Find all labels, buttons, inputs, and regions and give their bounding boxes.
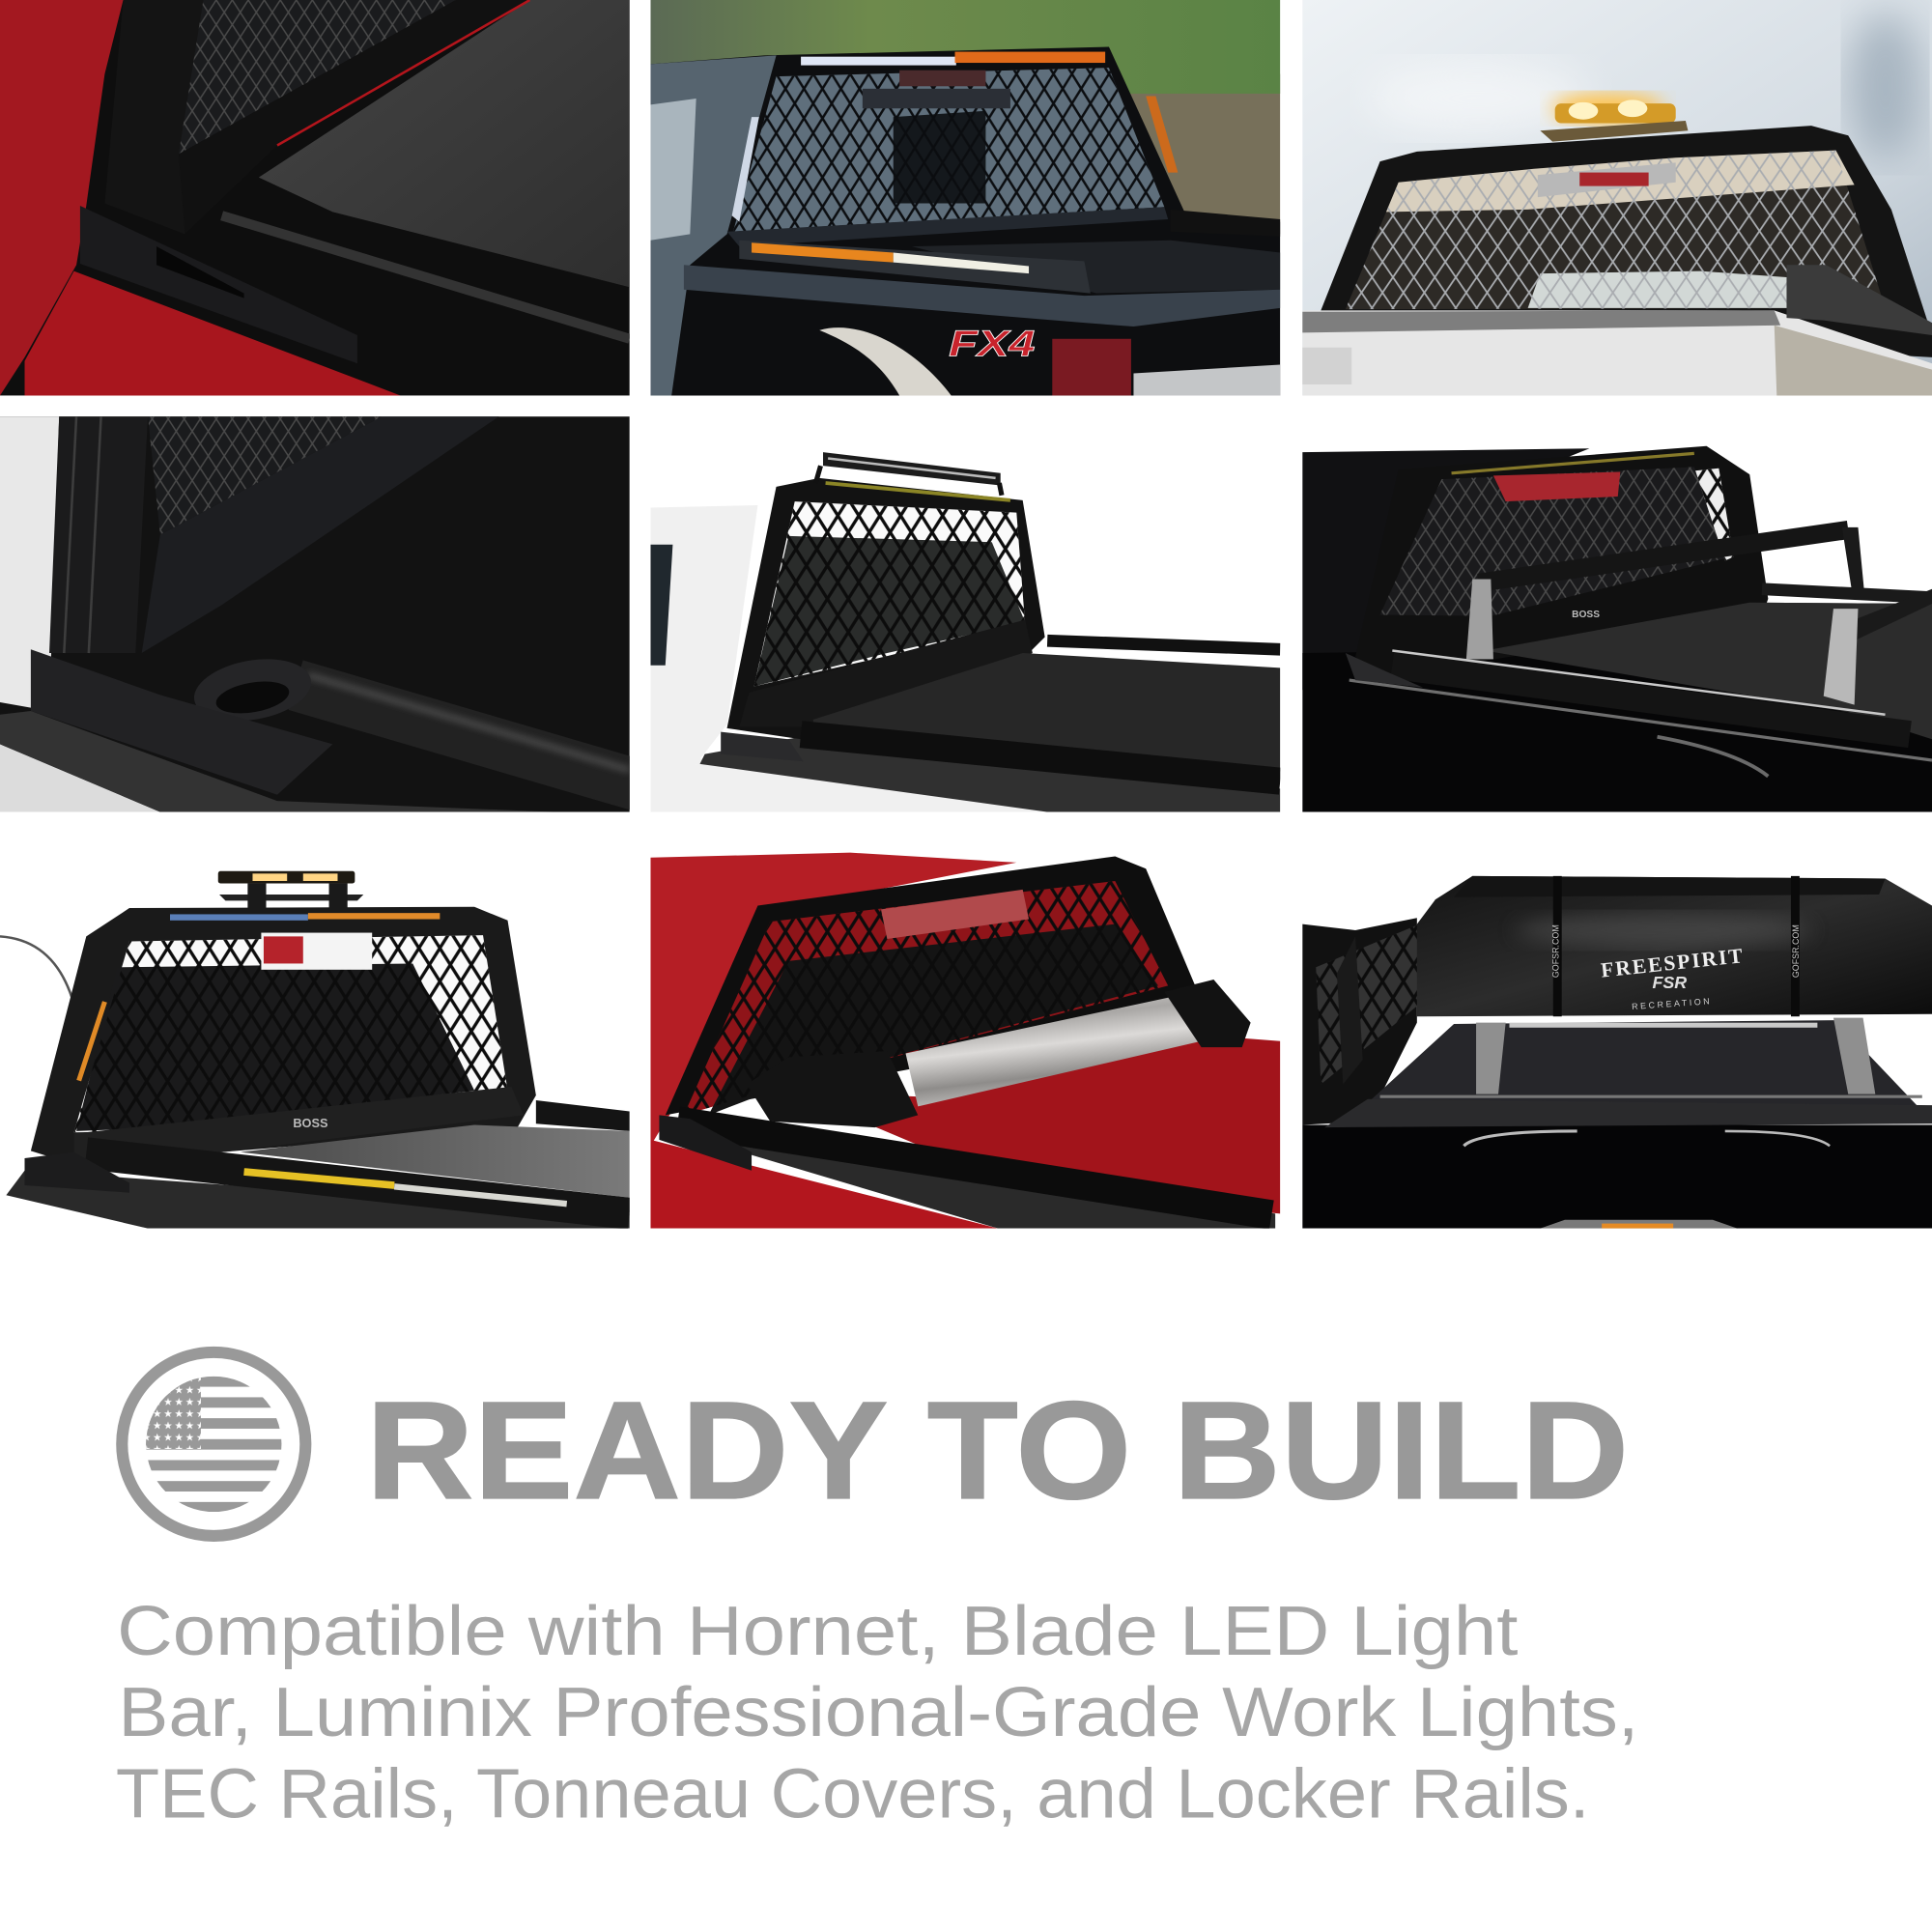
rack panel (142, 416, 499, 653)
brake light (881, 890, 1029, 939)
mesh white edge (1695, 469, 1734, 560)
tonneau (241, 1125, 630, 1198)
bed rail with light (739, 241, 1091, 294)
body text: Compatible with Hornet, Blade LED Light (117, 1592, 1518, 1670)
bed side (1775, 326, 1932, 395)
rack frame (666, 856, 1195, 1115)
mesh upper light area (754, 501, 1025, 686)
bed cap (684, 265, 1280, 327)
photo: rack with TEC rails on black truck (1302, 446, 1932, 811)
photo: rack with rolled tonneau on red truck (651, 852, 1281, 1229)
beacon mount (219, 895, 363, 900)
cab dark behind mesh (754, 536, 1025, 686)
rack panel wedge (179, 0, 529, 234)
side amber light (79, 1002, 104, 1081)
truck body (1302, 310, 1932, 395)
bag top fold (1454, 876, 1886, 897)
sill (699, 737, 1280, 812)
cab window (650, 99, 696, 241)
bracket (1346, 653, 1423, 688)
icon: circular American flag badge (122, 1352, 305, 1536)
photo: FreeSpirit roof-top tent bag on black truck (1302, 875, 1932, 1229)
cab interior through mesh (1346, 151, 1886, 309)
beacon base (1540, 121, 1688, 142)
strap lettering left: GOFSR.COM (1551, 924, 1561, 978)
FREESPIRIT lettering: FREESPIRIT (1600, 944, 1746, 982)
strap right (1792, 876, 1799, 1016)
window sliver (650, 545, 672, 666)
side white light (732, 117, 759, 222)
right roll end (1164, 980, 1251, 1047)
bed cap grey (1302, 310, 1780, 332)
crossbar (1509, 1023, 1817, 1028)
rear rail (1047, 640, 1280, 649)
rack mesh (754, 501, 1025, 686)
rack mesh background (733, 68, 1164, 232)
sill (0, 711, 554, 812)
body text: TEC Rails, Tonneau Covers, and Locker Rails. (116, 1754, 1589, 1833)
red truck bed side (25, 271, 401, 395)
yellow strip (826, 483, 1010, 500)
white lower body (696, 757, 1060, 812)
photo: rack with amber beacon and light strips on white truck (0, 871, 630, 1229)
rack lower panel (74, 1087, 524, 1164)
bed lip (1324, 1099, 1932, 1127)
rack lower panel (739, 620, 1033, 727)
orange strip light (955, 52, 1105, 63)
grass background (650, 0, 1280, 94)
sill (659, 1115, 1275, 1229)
light bar posts (815, 466, 820, 483)
rack frame (31, 907, 536, 1164)
red lower body (650, 1140, 998, 1229)
rack frame (727, 478, 1045, 739)
roof light bar (823, 452, 1001, 486)
tail light (1052, 339, 1131, 395)
tonneau in bed (1368, 1020, 1932, 1122)
cab blue-grey (650, 55, 777, 395)
rear rail (1762, 589, 1932, 598)
rack frame (1355, 446, 1768, 678)
front rail (678, 1122, 1271, 1215)
amber marker (1602, 1224, 1673, 1229)
cab (1302, 918, 1417, 1125)
orange strip light (308, 913, 440, 920)
FX4 badge: FX4 (949, 324, 1035, 365)
beacon lights (1555, 103, 1676, 124)
bed rail upright (1786, 265, 1932, 335)
rack mesh (179, 0, 456, 154)
brake light (1538, 162, 1676, 197)
beacon (218, 871, 355, 884)
lower window reflection (1528, 271, 1786, 308)
bracket (721, 732, 804, 761)
left silver upright (1476, 1023, 1506, 1094)
bracket (25, 1152, 129, 1193)
hood shine (1463, 1131, 1577, 1146)
left silver upright (1466, 579, 1493, 659)
base (6, 1171, 630, 1229)
red truck cab side (0, 0, 124, 395)
photo: black FX4 truck with lit rack (651, 0, 1281, 396)
white truck side (0, 744, 160, 812)
tube rail (296, 685, 640, 786)
pillar ribs (49, 416, 148, 653)
lower light orange (752, 242, 894, 263)
photo: tube rail corner close-up on white truck (0, 416, 630, 811)
beacon glow (1551, 94, 1664, 124)
RECREATION lettering: RECREATION (1632, 996, 1713, 1011)
mounting bracket (80, 206, 357, 363)
tonneau (1485, 603, 1932, 739)
roof (1302, 448, 1589, 690)
white cab curve (0, 936, 74, 1005)
right silver upright (1833, 1018, 1875, 1094)
photo: rack corner detail on red truck (0, 0, 630, 396)
flag canton (146, 1377, 201, 1449)
tonneau (912, 241, 1280, 294)
lower white light (394, 1186, 567, 1204)
white truck cab (0, 416, 59, 711)
body text (116, 1592, 1638, 1833)
tube rail (86, 1153, 630, 1213)
photo: rack with LED light bar on white truck (651, 452, 1281, 811)
rack mesh (1380, 467, 1731, 616)
rack frame (1321, 126, 1932, 357)
tonneau (813, 653, 1280, 771)
side orange light (1146, 96, 1178, 173)
rack pillar (1337, 936, 1363, 1084)
flag stripes (146, 1377, 282, 1513)
FSR lettering: FSR (1652, 973, 1687, 992)
mounting bracket (31, 649, 332, 795)
BOSS logo: BOSS (293, 1116, 327, 1130)
blue-white strip light (801, 57, 956, 66)
bag shine (1516, 913, 1811, 948)
silver rolled tonneau (906, 992, 1202, 1106)
strap lettering right: GOFSR.COM (1791, 924, 1801, 978)
crossbar rail (1479, 529, 1848, 582)
heading: READY TO BUILD (366, 1373, 1629, 1528)
lower amber light (244, 1172, 394, 1185)
rail highlight (222, 215, 630, 339)
tube end (189, 651, 316, 729)
white cab (650, 505, 757, 812)
blue strip light (170, 914, 308, 921)
truck body (1302, 1125, 1932, 1229)
tube rail (1392, 666, 1910, 734)
photo: white truck with amber beacon against sky (1302, 0, 1932, 396)
sky (1302, 0, 1932, 395)
rack window and interior (74, 935, 508, 1132)
upper window light (1386, 151, 1855, 212)
brake light bracket (863, 89, 1010, 108)
rack lower panel (727, 207, 1168, 246)
door handle (1302, 348, 1351, 384)
rack mesh (148, 416, 382, 535)
BOSS logo: BOSS (1572, 610, 1600, 620)
right silver upright (1824, 609, 1858, 705)
tonneau cover surface (259, 0, 630, 287)
red bed interior (788, 1035, 1280, 1213)
wheel reflection (819, 327, 952, 395)
bed rail (1171, 210, 1280, 237)
left roll (747, 1051, 918, 1127)
rack mesh (1346, 151, 1886, 309)
bracket slot (156, 246, 244, 298)
far bed rail (536, 1100, 630, 1131)
rack mesh (684, 881, 1168, 1115)
rear upright (1842, 527, 1864, 591)
roll rail (1380, 1095, 1922, 1097)
fender shine (1658, 737, 1768, 777)
rack pillar (104, 0, 203, 234)
truck body (1302, 603, 1932, 812)
chrome highlight on sill (1350, 680, 1932, 760)
strap left (1554, 876, 1561, 1016)
yellow strip (1452, 453, 1694, 473)
ground (650, 74, 1280, 234)
front tube rail (801, 734, 1280, 781)
rack mesh side (1316, 924, 1419, 1084)
brake light (1493, 472, 1620, 501)
bracket (659, 1115, 752, 1171)
bumper mount (1540, 1220, 1737, 1229)
rack mesh (733, 68, 1164, 232)
red reflection line (277, 0, 529, 146)
right crossbar (1848, 589, 1932, 640)
truck body (650, 46, 1280, 395)
tent bag (1417, 876, 1932, 1016)
rack mesh (74, 935, 508, 1132)
body text: Bar, Luminix Professional-Grade Work Lights, (118, 1673, 1638, 1751)
brake light window (261, 933, 372, 970)
bumper chrome (1133, 365, 1280, 395)
lower light white (894, 252, 1029, 273)
red roof and cab (650, 853, 1016, 1146)
